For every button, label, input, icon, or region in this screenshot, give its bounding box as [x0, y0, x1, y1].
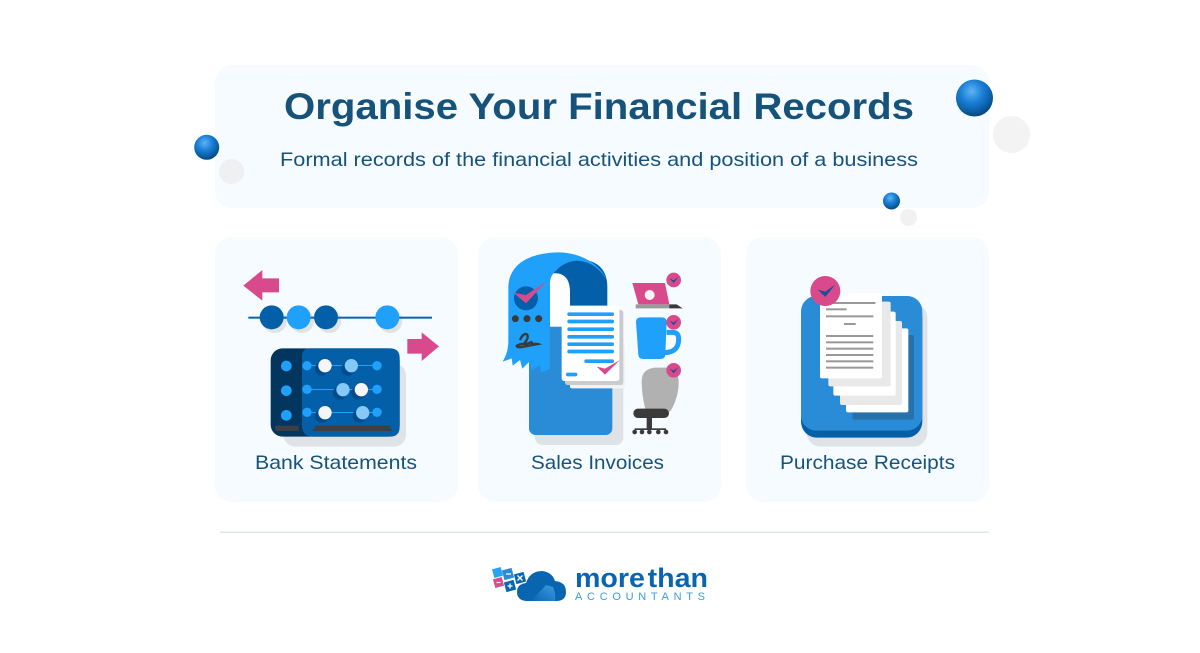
panel: bank statements: [215, 237, 458, 502]
icon: abacus tablet: [271, 348, 406, 447]
icon: mug: [636, 315, 681, 359]
icon: right arrow: [407, 332, 439, 361]
receipts pages: [820, 293, 908, 412]
blue scarf with check: [503, 252, 607, 372]
panel: purchase receipts: [746, 237, 989, 502]
clipboard body: [529, 260, 623, 445]
header panel: [215, 65, 989, 208]
panel: sales invoices: [478, 237, 721, 502]
icon: invoice and office items: [503, 252, 683, 445]
invoice document: [562, 306, 625, 388]
folder: [801, 296, 927, 447]
tagline: ACCOUNTANTS: [575, 591, 705, 603]
icon: calculator keys: [492, 567, 526, 592]
subtitle: Formal records of the financial activities and position of a business: [280, 149, 918, 171]
label: sales invoices: Sales Invoices: [531, 452, 664, 474]
logo: [492, 563, 708, 603]
bead line: [248, 305, 432, 333]
wordmark: more than: [575, 563, 708, 593]
title: Organise Your Financial Records: [284, 86, 914, 127]
icon: abacus and arrows: [243, 270, 439, 447]
label: bank statements: Bank Statements: [255, 452, 417, 474]
decorative spheres: [194, 80, 1030, 226]
icon: laptop: [632, 273, 683, 308]
icon: stack of receipts: [801, 276, 927, 447]
check badge: [810, 276, 840, 306]
icon: office chair: [632, 363, 681, 434]
icon: left arrow: [243, 270, 279, 301]
icon: cloud: [517, 571, 566, 601]
label: purchase receipts: Purchase Receipts: [780, 452, 955, 474]
